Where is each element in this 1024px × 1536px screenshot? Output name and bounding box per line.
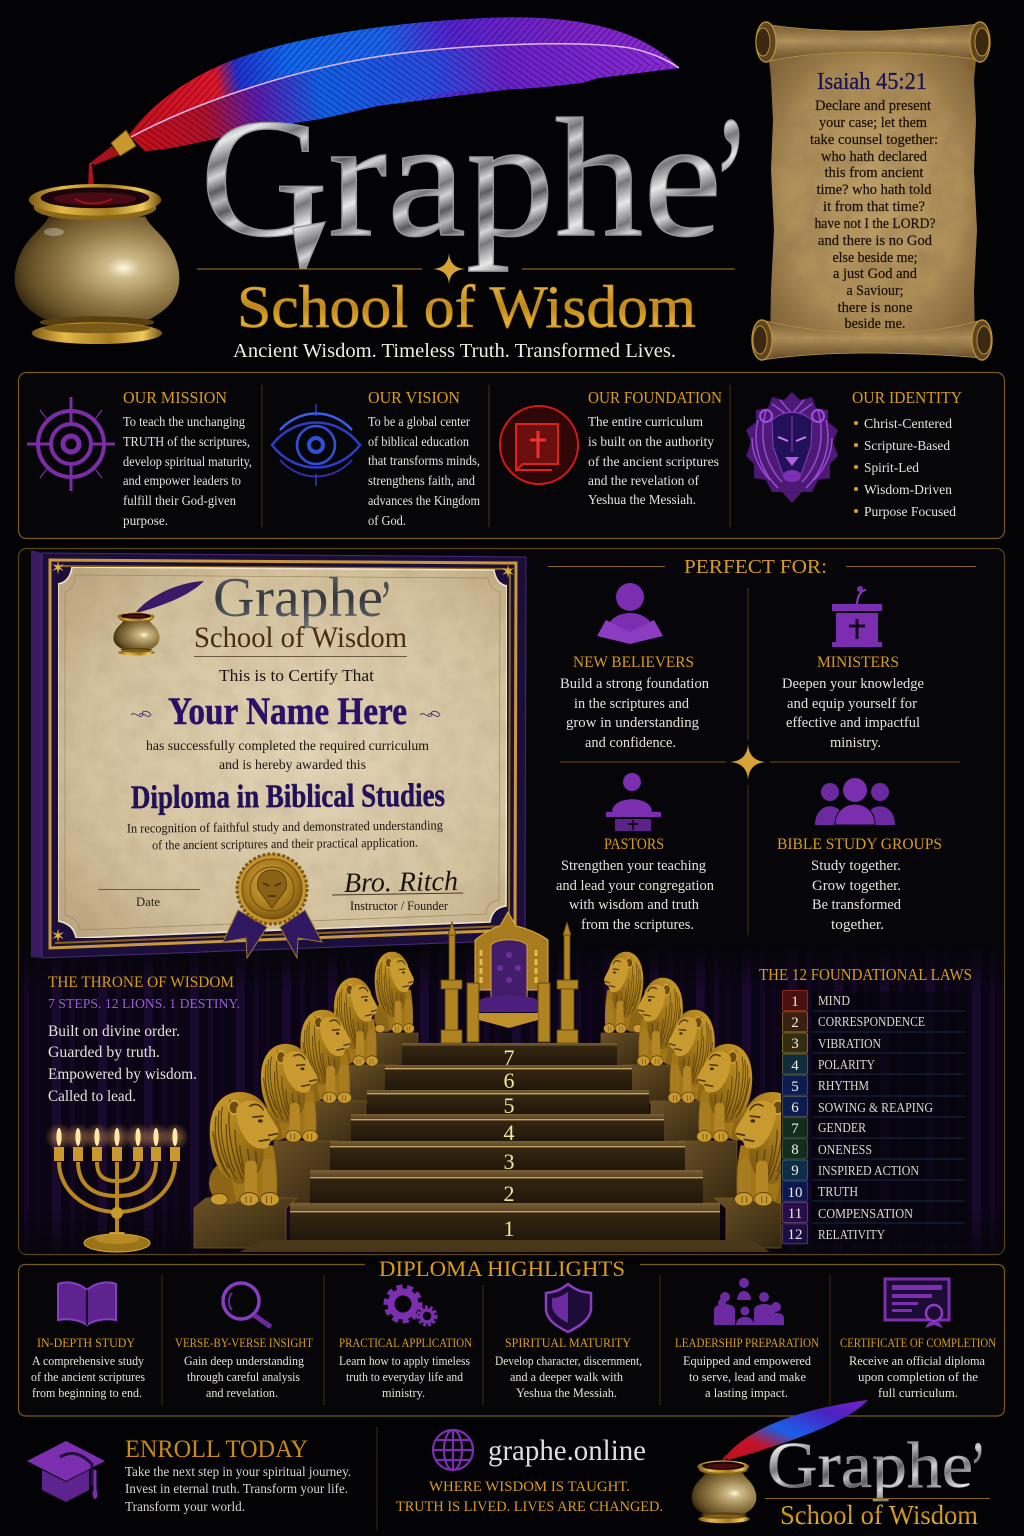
scripture text	[810, 98, 938, 332]
text: vision	[368, 414, 480, 528]
icon: eye	[272, 404, 360, 486]
heading: laws: THE 12 FOUNDATIONAL LAWS	[759, 965, 972, 984]
text: foundation: and the revelation of	[588, 473, 699, 488]
text block: the throne of wisdom: Empowered by wisdom.	[48, 1066, 197, 1083]
text block: the throne of wisdom: Built on divine order.	[48, 1023, 180, 1040]
audience: pastors: with wisdom and truth	[569, 897, 699, 913]
diploma logo	[194, 567, 407, 657]
scripture text: who hath declared	[821, 149, 928, 165]
scripture text: there is none	[838, 300, 912, 316]
law rows: TRUTH	[818, 1184, 858, 1199]
scripture text: it from that time?	[823, 199, 925, 215]
audience: pastors: PASTORS	[604, 836, 664, 853]
highlight: in-depth study: of the ancient scriptures	[31, 1370, 145, 1384]
text: vision: To be a global center	[368, 414, 470, 429]
text: foundation: of the ancient scriptures	[588, 454, 719, 469]
list: identity: Wisdom-Driven	[864, 483, 952, 498]
list: identity: Spirit-Led	[864, 461, 919, 476]
highlight: in-depth study: from beginning to end.	[32, 1386, 142, 1400]
step numbers: 1	[504, 1216, 514, 1241]
text block: the throne of wisdom: Called to lead.	[48, 1088, 136, 1105]
icon: pulpit	[832, 586, 882, 647]
highlight: leadership preparation	[675, 1278, 820, 1400]
quadrant dividers with star	[560, 588, 960, 935]
highlight: spiritual maturity: and a deeper walk with	[510, 1370, 624, 1384]
text block: the throne of wisdom	[48, 974, 240, 1105]
step numbers: 3	[504, 1149, 514, 1174]
tagline: Ancient Wisdom. Timeless Truth. Transformed Lives.	[233, 340, 676, 362]
panel: 12 foundational laws	[759, 965, 972, 1244]
audience: bible study groups: Study together.	[811, 858, 901, 874]
heading: our vision: OUR VISION	[368, 388, 460, 407]
scroll: Isaiah 45:21	[752, 22, 992, 360]
scripture text: beside me.	[844, 316, 906, 332]
scripture text: a just God and	[833, 266, 918, 282]
text block: the throne of wisdom: 7 STEPS. 12 LIONS. 1 DESTINY.	[48, 997, 240, 1012]
step numbers: 7	[504, 1045, 514, 1070]
scripture text: a Saviour;	[846, 283, 904, 299]
audience: pastors	[556, 773, 714, 933]
highlight: spiritual maturity: Develop character, discernment,	[495, 1354, 642, 1368]
list: identity: Purpose Focused	[864, 505, 956, 520]
text: vision: of biblical education	[368, 434, 469, 449]
diploma logo: School of Wisdom	[194, 621, 407, 654]
scripture text: else beside me;	[832, 250, 918, 266]
text: mission	[123, 414, 252, 528]
law rows: 10	[788, 1185, 802, 1201]
subtitle: School of Wisdom: School of Wisdom	[237, 274, 696, 340]
icon: bible in red circle	[500, 406, 578, 484]
law rows	[782, 990, 968, 1244]
audience: bible study groups: BIBLE STUDY GROUPS	[777, 836, 942, 853]
highlight: spiritual maturity: Yeshua the Messiah.	[516, 1386, 617, 1400]
call to action: enroll today	[125, 1436, 351, 1514]
website: graphe.online: WHERE WISDOM IS TAUGHT.	[429, 1479, 630, 1495]
list: identity: Christ-Centered	[864, 417, 952, 432]
icon: menorah	[45, 1123, 189, 1252]
audience: ministers: Deepen your knowledge	[782, 676, 924, 692]
icon: throne with columns	[441, 912, 578, 1043]
law rows: INSPIRED ACTION	[818, 1163, 919, 1178]
award statement: and is hereby awarded this	[219, 758, 366, 773]
footer logo: School of Wisdom	[780, 1500, 978, 1530]
highlight: leadership preparation: to serve, lead and make	[689, 1370, 806, 1384]
diploma	[31, 550, 526, 958]
law rows: GENDER	[818, 1120, 866, 1135]
throne of wisdom illustration	[194, 912, 802, 1252]
audience: bible study groups: together.	[831, 917, 884, 933]
highlight: certificate of completion: full curriculum.	[878, 1386, 958, 1400]
highlight: leadership preparation: Equipped and empowered	[683, 1354, 812, 1368]
step numbers: 6	[504, 1068, 514, 1093]
audience: new believers: and confidence.	[585, 735, 676, 751]
heading: our foundation: OUR FOUNDATION	[588, 388, 722, 407]
highlight: certificate of completion: upon completion of the	[858, 1370, 978, 1384]
panel: main frame	[18, 548, 1004, 1254]
text: foundation: is built on the authority	[588, 434, 714, 449]
website: graphe.online: TRUTH IS LIVED. LIVES ARE CHANGED.	[396, 1499, 663, 1515]
highlight: practical application: Learn how to apply timeless	[339, 1354, 470, 1368]
law rows: SOWING & REAPING	[818, 1100, 933, 1115]
list: identity	[854, 417, 956, 520]
vertical divider	[376, 1427, 378, 1530]
award statement	[146, 739, 429, 773]
list: identity: Scripture-Based	[864, 439, 950, 454]
panel: diploma highlights	[18, 1256, 1004, 1416]
audience: ministers	[782, 586, 924, 751]
date line	[98, 889, 200, 909]
highlight: spiritual maturity	[495, 1284, 642, 1400]
law rows: 6	[791, 1100, 799, 1116]
text: vision: advances the Kingdom	[368, 493, 480, 508]
audience: ministers: effective and impactful	[786, 715, 920, 731]
law rows: RELATIVITY	[818, 1227, 885, 1242]
law rows: 1	[791, 994, 799, 1010]
call to action: enroll today: Invest in eternal truth. Transform your life.	[125, 1481, 348, 1496]
scripture text: and there is no God	[818, 233, 933, 249]
scripture text: Declare and present	[815, 98, 931, 114]
left pedestals	[194, 1033, 418, 1248]
law rows: COMPENSATION	[818, 1206, 913, 1221]
icon: person reading	[597, 583, 663, 644]
name: Your Name Here	[168, 690, 407, 733]
divider with star	[197, 253, 735, 284]
right pedestals	[601, 1033, 781, 1248]
highlight: spiritual maturity: SPIRITUAL MATURITY	[505, 1335, 632, 1350]
ribbon and gold seal	[223, 854, 322, 958]
title: Graphe': ’	[712, 76, 750, 297]
step numbers: 4	[504, 1120, 514, 1145]
audience: new believers: Build a strong foundation	[560, 676, 709, 692]
icon: three people	[815, 778, 895, 825]
icon: graduation cap	[27, 1441, 105, 1502]
highlight: practical application: PRACTICAL APPLICATION	[339, 1335, 473, 1350]
law rows: 2	[791, 1015, 799, 1031]
text: mission: and empower leaders to	[123, 473, 241, 488]
website: graphe.online: graphe.online	[488, 1434, 646, 1467]
audience: ministers: MINISTERS	[817, 654, 899, 671]
signature	[332, 866, 463, 913]
text: vision: that transforms minds,	[368, 453, 480, 468]
corner stars	[50, 558, 516, 946]
law rows: 5	[791, 1079, 799, 1095]
date line: Date	[136, 895, 160, 909]
law rows: VIBRATION	[818, 1036, 881, 1051]
diploma logo: Graphe	[213, 567, 383, 629]
highlight: leadership preparation: a lasting impact.	[705, 1386, 788, 1400]
scripture text: have not I the LORD?	[814, 216, 936, 232]
right five lions	[604, 952, 781, 1206]
highlight: verse-by-verse insight: through careful analysis	[187, 1370, 300, 1384]
call to action: enroll today: ENROLL TODAY	[125, 1436, 308, 1463]
footer logo: Graphe	[767, 1429, 973, 1502]
law rows: 3	[791, 1036, 799, 1052]
text: mission: To teach the unchanging	[123, 414, 245, 429]
law rows: MIND	[818, 993, 850, 1008]
icon: pastor at lectern	[606, 773, 661, 831]
audience: pastors: from the scriptures.	[581, 917, 694, 933]
icon: small ink pot and feather	[113, 581, 204, 655]
scripture text: time? who hath told	[816, 182, 932, 198]
diploma logo: ’	[380, 567, 392, 638]
diploma title: Diploma in Biblical Studies	[131, 778, 445, 816]
text block: the throne of wisdom: THE THRONE OF WISDOM	[48, 974, 234, 991]
text: mission: fulfill their God-given	[123, 493, 236, 508]
highlight: verse-by-verse insight	[175, 1283, 313, 1400]
heading: our identity: OUR IDENTITY	[852, 388, 962, 407]
step numbers: 5	[504, 1093, 514, 1118]
heading: our mission: OUR MISSION	[123, 388, 227, 407]
text: mission: develop spiritual maturity,	[123, 454, 252, 469]
text: vision: strengthens faith, and	[368, 473, 475, 488]
text: foundation: The entire curriculum	[588, 414, 703, 429]
icon: purple lion head	[746, 392, 838, 503]
law rows: CORRESPONDENCE	[818, 1014, 925, 1029]
highlight: in-depth study: IN-DEPTH STUDY	[37, 1335, 136, 1350]
highlight: verse-by-verse insight: and revelation.	[206, 1386, 278, 1400]
staircase	[240, 1043, 770, 1252]
law rows: ONENESS	[818, 1142, 872, 1157]
left five lions	[209, 952, 414, 1206]
law rows: POLARITY	[818, 1057, 875, 1072]
call to action: enroll today: Take the next step in your spiritual journey.	[125, 1464, 351, 1479]
footer logo	[692, 1400, 990, 1530]
audience: bible study groups: Be transformed	[812, 897, 901, 913]
audience: new believers	[560, 583, 709, 751]
highlight: certificate of completion	[840, 1279, 997, 1400]
audience: new believers: NEW BELIEVERS	[573, 654, 694, 671]
text: vision: of God.	[368, 513, 406, 528]
highlight: in-depth study: A comprehensive study	[32, 1354, 145, 1368]
text: foundation	[588, 414, 719, 507]
highlight: in-depth study	[31, 1282, 145, 1400]
highlight: practical application	[339, 1287, 473, 1400]
audience: new believers: in the scriptures and	[574, 696, 689, 712]
law rows: 11	[788, 1206, 802, 1222]
title: Graphe': Graphe	[200, 84, 722, 272]
text: mission: TRUTH of the scriptures,	[123, 434, 250, 449]
scripture reference: Isaiah 45:21	[817, 69, 927, 95]
signature: Bro. Ritch	[344, 866, 458, 899]
step numbers	[504, 1045, 514, 1241]
audience: pastors: Strengthen your teaching	[561, 858, 706, 874]
scripture text: take counsel together:	[810, 132, 938, 148]
call to action: enroll today: Transform your world.	[125, 1499, 245, 1514]
law rows: 7	[791, 1121, 799, 1137]
panel: mission, vision, foundation, identity	[18, 372, 1004, 538]
icon: quill feather	[87, 17, 679, 206]
corner stars: ✶	[500, 562, 516, 582]
curtain backdrop	[19, 945, 1004, 1254]
icon: globe	[433, 1430, 473, 1470]
audience: bible study groups: Grow together.	[812, 878, 901, 894]
audience: ministers: ministry.	[830, 735, 881, 751]
section heading: perfect for: PERFECT FOR:	[684, 556, 827, 578]
text: foundation: Yeshua the Messiah.	[588, 492, 696, 507]
audience: bible study groups	[777, 778, 942, 933]
highlight: certificate of completion: CERTIFICATE OF COMPLETION	[840, 1335, 997, 1350]
law rows: 4	[791, 1058, 799, 1074]
law rows: 12	[788, 1227, 802, 1243]
highlight: certificate of completion: Receive an official diploma	[849, 1354, 985, 1368]
highlight: practical application: truth to everyday life and	[346, 1370, 464, 1384]
highlight: practical application: ministry.	[382, 1386, 425, 1400]
law rows: RHYTHM	[818, 1078, 869, 1093]
scripture text: your case; let them	[819, 115, 928, 131]
audience: ministers: and equip yourself for	[787, 696, 917, 712]
icon: brass ink pot	[15, 184, 179, 344]
audience: new believers: grow in understanding	[566, 715, 699, 731]
text block: the throne of wisdom: Guarded by truth.	[48, 1044, 160, 1061]
corner stars: ✶	[50, 558, 66, 578]
law rows: 9	[791, 1163, 799, 1179]
certify line: This is to Certify That	[219, 666, 374, 685]
icon: target	[27, 397, 115, 491]
step numbers: 2	[504, 1181, 514, 1206]
scripture text: this from ancient	[824, 165, 924, 181]
law rows: 8	[791, 1142, 799, 1158]
text: mission: purpose.	[123, 513, 168, 528]
recognition text	[127, 817, 444, 853]
award statement: has successfully completed the required curriculum	[146, 739, 429, 754]
heading: diploma highlights: DIPLOMA HIGHLIGHTS	[379, 1256, 625, 1281]
corner stars: ✶	[50, 926, 66, 946]
highlight: verse-by-verse insight: VERSE-BY-VERSE INSIGHT	[175, 1335, 313, 1350]
recognition text: In recognition of faithful study and demonstrated understanding	[127, 817, 443, 836]
highlight: leadership preparation: LEADERSHIP PREPARATION	[675, 1335, 820, 1350]
highlight: verse-by-verse insight: Gain deep understanding	[184, 1354, 305, 1368]
audience: pastors: and lead your congregation	[556, 878, 714, 894]
footer logo: ’	[970, 1425, 986, 1512]
recognition text: of the ancient scriptures and their practical application.	[152, 835, 418, 852]
website: graphe.online	[396, 1430, 663, 1515]
signature: Instructor / Founder	[350, 898, 449, 913]
